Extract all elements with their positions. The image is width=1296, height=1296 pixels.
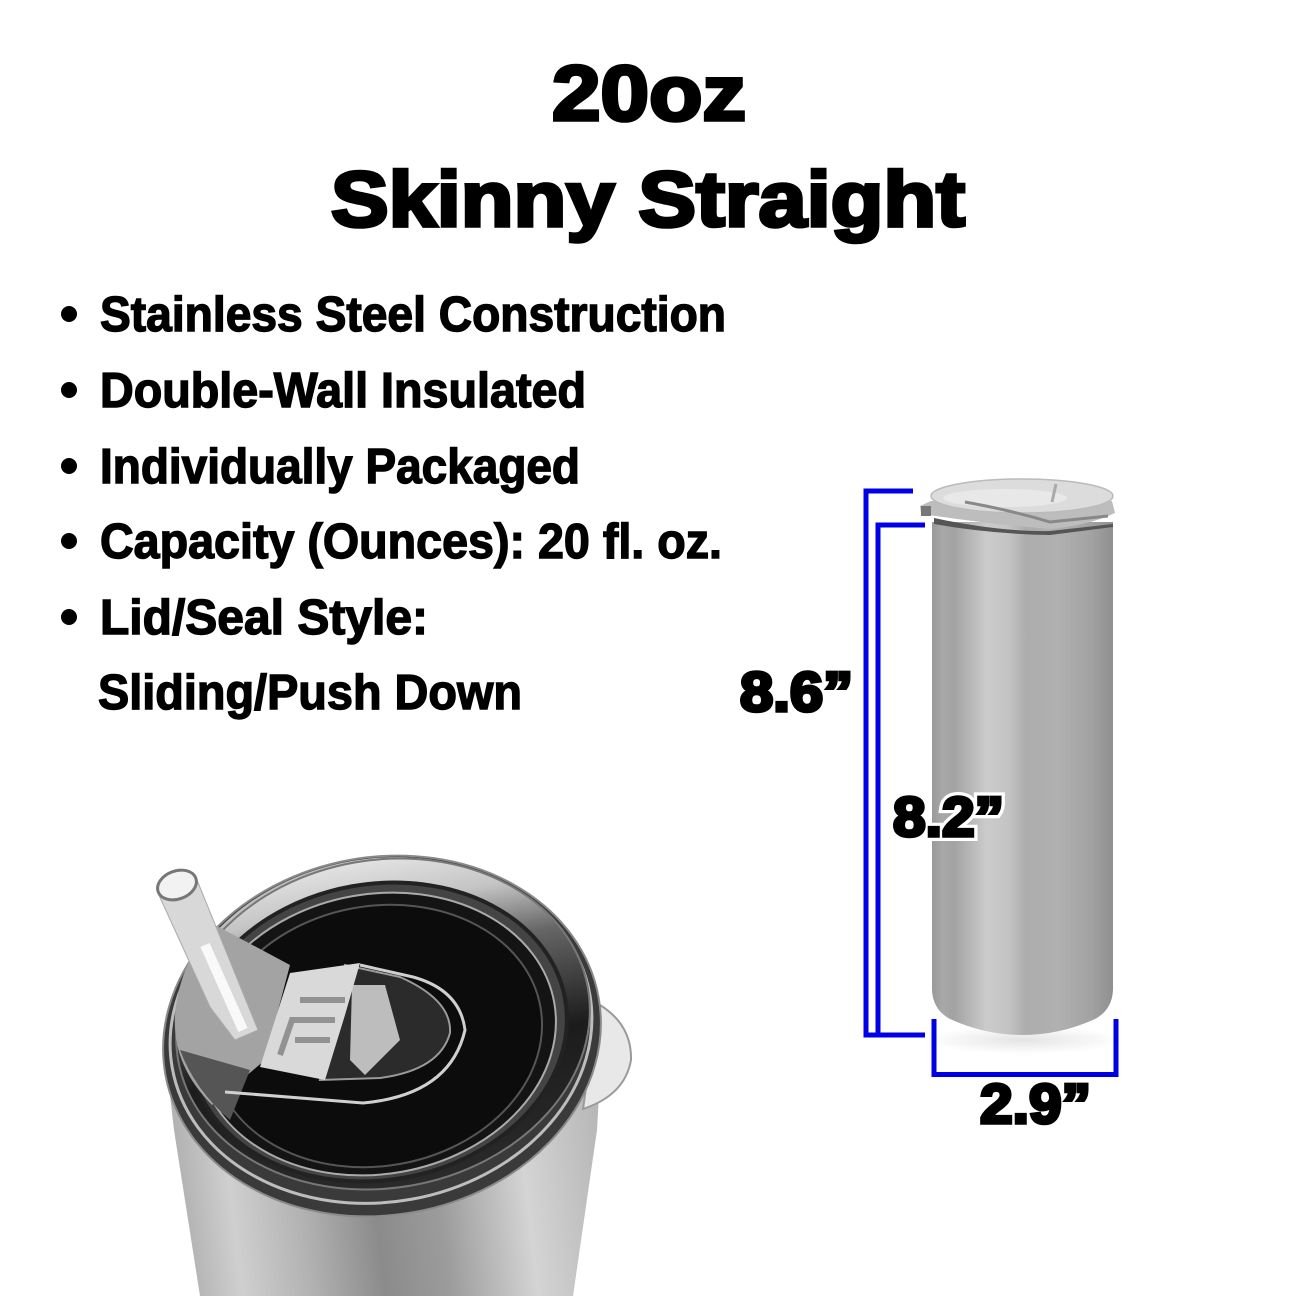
straw opening — [153, 865, 201, 905]
slider outline — [225, 965, 465, 1103]
bullet: Stainless Steel Construction: Stainless Steel Construction — [100, 288, 726, 342]
black lid centre — [191, 879, 563, 1193]
title: Skinny Straight: Skinny Straight — [331, 155, 965, 243]
bullet: Double-Wall Insulated: Double-Wall Insulated — [100, 364, 586, 418]
label: 8.2 inches: 8.2” — [893, 785, 1004, 848]
photo: tall tumbler with lid — [920, 479, 1124, 1054]
straw — [158, 880, 258, 1040]
photo: close-up of lid and straw — [134, 822, 631, 1296]
title: 20oz: 20oz — [552, 49, 746, 137]
lower rim highlight — [143, 826, 619, 1236]
label: 8.6 inches: 8.6” — [740, 660, 853, 723]
left lid translucent area — [175, 925, 290, 1105]
bullet: Capacity: Capacity (Ounces): 20 fl. oz. — [100, 515, 722, 569]
feature list — [61, 288, 726, 720]
outer rim — [134, 822, 630, 1250]
label: 2.9 inches: 2.9” — [980, 1072, 1091, 1135]
side tab — [583, 1005, 631, 1109]
dimension bracket: diameter — [934, 1019, 1116, 1074]
dimension bracket: overall height — [866, 491, 925, 1035]
bullet: Lid/Seal Style — [61, 591, 522, 720]
bullet: Lid/Seal Style: Lid/Seal Style: — [100, 591, 428, 645]
label: 8.2 inches: 8.2” — [893, 785, 1004, 848]
bullet: Lid/Seal Style: Sliding/Push Down — [98, 666, 522, 720]
bullet: Individually Packaged: Individually Packaged — [100, 440, 580, 494]
tumbler body — [166, 1040, 602, 1296]
slider block — [260, 963, 360, 1080]
slider oval — [320, 965, 450, 1080]
dimension bracket: body height — [878, 525, 925, 1035]
lid inner rings — [165, 853, 591, 1211]
